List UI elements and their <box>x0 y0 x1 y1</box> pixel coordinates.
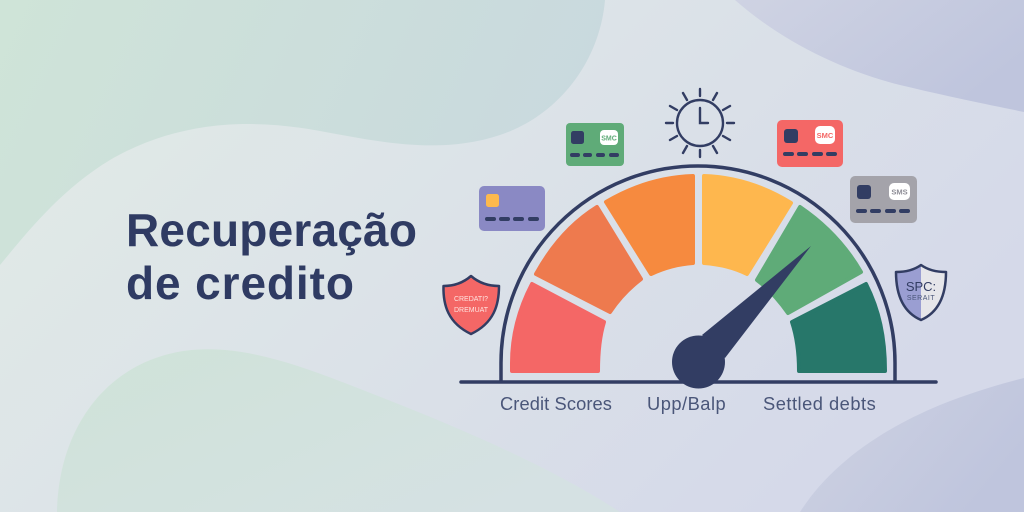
blob: bottom right <box>800 378 1024 512</box>
blob: bottom left <box>57 349 620 512</box>
label: settled debts: Settled debts <box>763 393 876 414</box>
icon: spc shield <box>896 265 946 320</box>
icon: spc shield: SERAIT <box>907 295 935 302</box>
gauge baseline <box>461 380 936 384</box>
icon: grey card: SMS <box>891 188 908 196</box>
icon: red shield: DREMUAT <box>454 307 489 314</box>
icon: red shield: CREDATI? <box>454 296 488 303</box>
segment: dark green <box>792 284 885 371</box>
title line 2: de credito <box>126 257 355 309</box>
gauge <box>461 166 936 388</box>
icon: spc shield: SPC: <box>906 279 936 294</box>
gauge outer arc <box>501 166 895 382</box>
icon: red shield <box>443 276 499 334</box>
segment: green <box>757 207 861 313</box>
icon: green card <box>566 123 624 166</box>
title: Recuperação <box>126 204 417 256</box>
segment: orange-red <box>536 207 641 312</box>
label: credit scores: Credit Scores <box>500 393 612 414</box>
icon: red card: SMC <box>817 131 834 140</box>
segment: orange <box>606 176 693 274</box>
icon: purple card <box>479 186 545 231</box>
label: upp/balp: Upp/Balp <box>647 393 726 414</box>
blob: top left <box>0 0 605 265</box>
icon: red card <box>777 120 843 167</box>
segment: yellow <box>704 176 791 274</box>
icon: clock sun <box>666 89 734 157</box>
icon: green card: SMC <box>601 136 617 142</box>
icon: grey card <box>850 176 917 223</box>
segment: red <box>512 284 604 371</box>
blob: top right <box>735 0 1024 112</box>
needle <box>672 246 811 388</box>
